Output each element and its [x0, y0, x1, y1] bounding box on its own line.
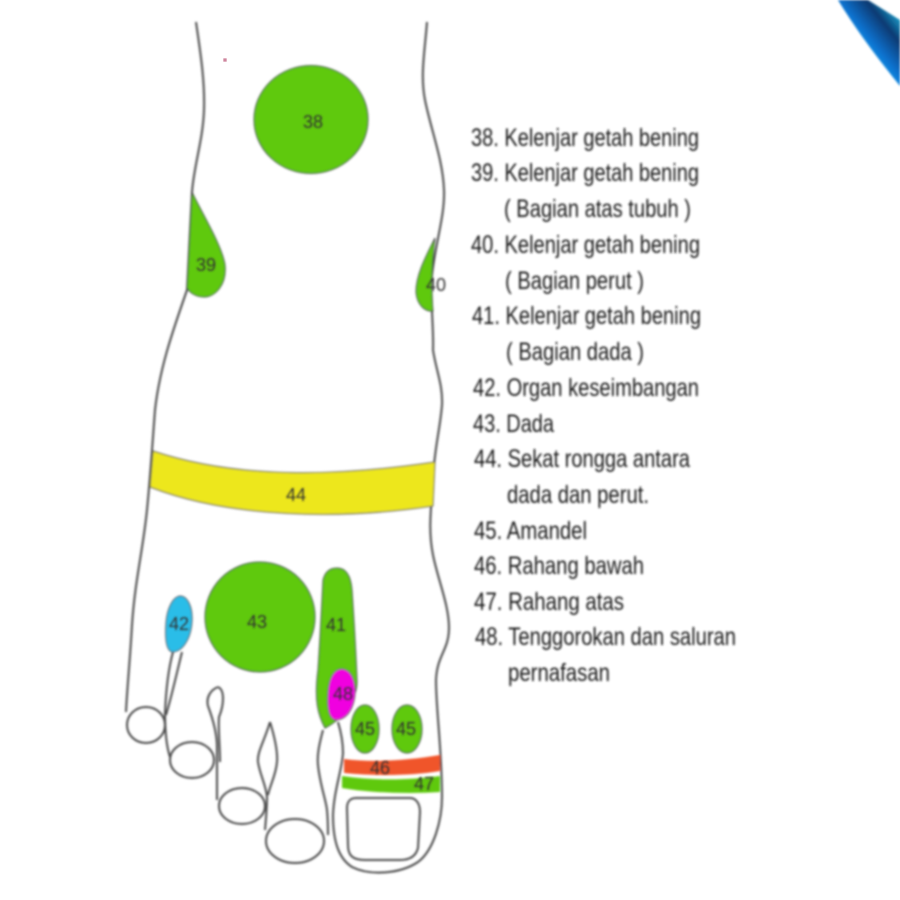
legend 41 note: ( Bagian dada ): [506, 338, 644, 366]
legend 38: 38. Kelenjar getah bening: [471, 124, 699, 152]
zone numbers: 45: [396, 719, 416, 739]
legend 40: 40. Kelenjar getah bening: [471, 231, 700, 259]
legend 44: 44. Sekat rongga antara: [474, 445, 690, 473]
legend 39 note: ( Bagian atas tubuh ): [504, 195, 691, 223]
zone 47: [342, 776, 440, 793]
zone 43: [205, 562, 315, 672]
zone numbers: 38: [303, 112, 323, 132]
small red dot: [223, 58, 227, 62]
zone numbers: [169, 112, 446, 794]
legend 48 continued: pernafasan: [508, 659, 610, 687]
zone numbers: 47: [414, 774, 434, 794]
legend 47: 47. Rahang atas: [474, 588, 624, 616]
zone 39: [187, 192, 225, 297]
legend 39: 39. Kelenjar getah bening: [471, 159, 699, 187]
zone numbers: 43: [247, 612, 267, 632]
foot diagram: [126, 22, 449, 873]
zone numbers: 44: [286, 485, 306, 505]
zone 38: [254, 66, 368, 174]
zone numbers: 42: [169, 614, 189, 634]
zone 41: [316, 568, 357, 728]
zone 46: [344, 755, 440, 775]
legend 43: 43. Dada: [473, 410, 554, 438]
zone numbers: 48: [333, 684, 353, 704]
foot outline: [126, 22, 449, 873]
zone 48: [328, 669, 355, 720]
legend text: [471, 124, 736, 687]
corner ribbon: [838, 0, 900, 86]
toe pads: [127, 707, 165, 743]
legend 42: 42. Organ keseimbangan: [473, 374, 699, 402]
legend 40 note: ( Bagian perut ): [505, 267, 644, 295]
legend 45: 45. Amandel: [474, 517, 587, 545]
legend 48: 48. Tenggorokan dan saluran: [475, 623, 736, 651]
legend 44 continued: dada dan perut.: [507, 481, 649, 509]
zone 45 right: [392, 705, 422, 753]
legend 41: 41. Kelenjar getah bening: [472, 302, 701, 330]
zone 44: [150, 451, 435, 514]
zone 45 left: [351, 705, 379, 753]
zone numbers: 46: [370, 758, 390, 778]
toe gaps: [165, 652, 173, 757]
zone 40: [416, 238, 435, 311]
toenail: [347, 798, 420, 860]
zone numbers: 45: [355, 719, 375, 739]
zone numbers: 40: [426, 275, 446, 295]
zone 42: [166, 596, 192, 652]
zone numbers: 39: [196, 255, 216, 275]
legend 46: 46. Rahang bawah: [474, 552, 644, 580]
zone numbers: 41: [326, 615, 346, 635]
